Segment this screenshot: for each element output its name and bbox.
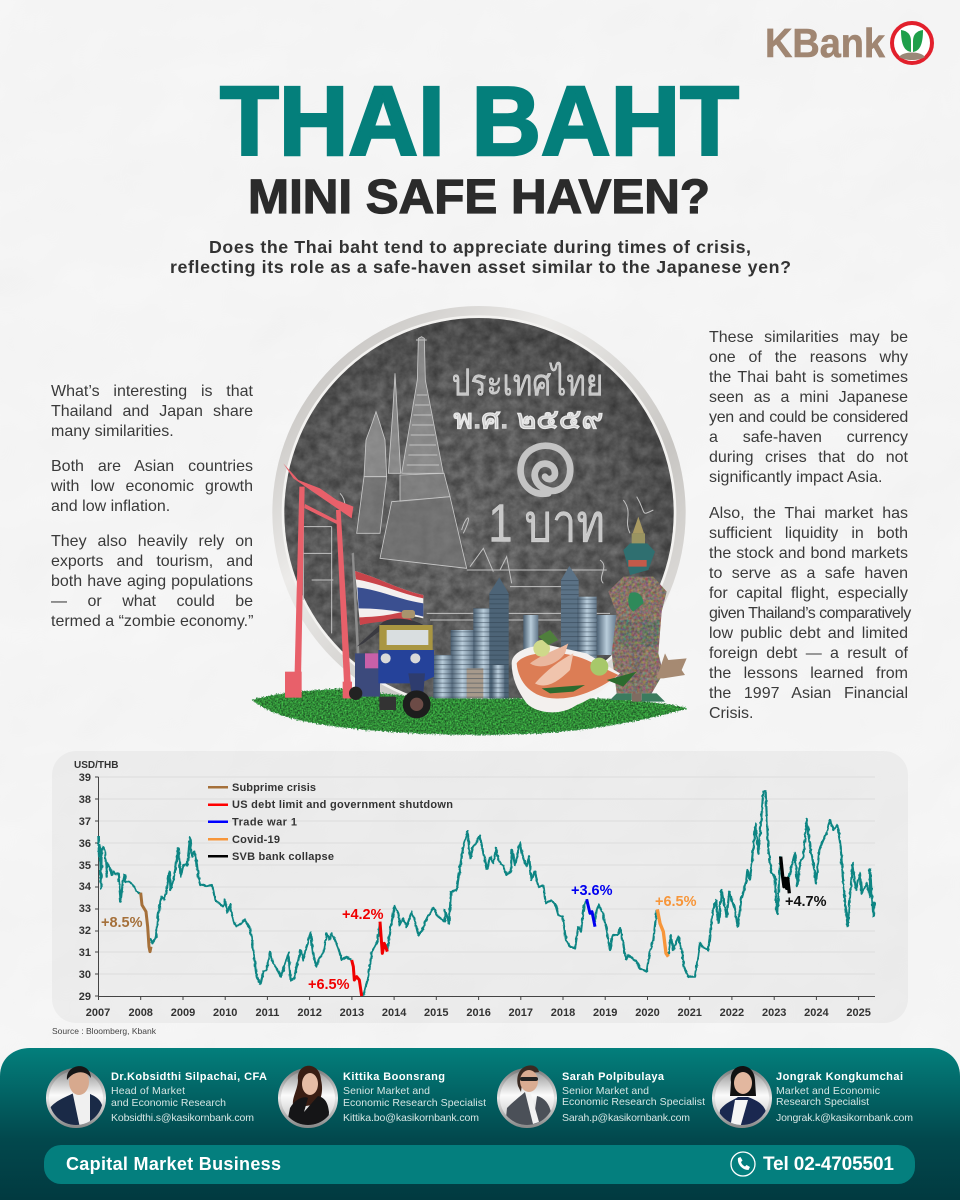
right text block: Also, the Thai market has xyxy=(709,505,908,522)
y axis labels: 39 xyxy=(79,772,91,784)
y axis labels: 38 xyxy=(79,794,91,806)
x axis labels: 2022 xyxy=(720,1007,744,1019)
person: Kobsidthi: Kobsidthi.s@kasikornbank.com xyxy=(111,1112,254,1124)
right text block: the lessons learned from xyxy=(709,665,908,682)
left text block: with low economic growth xyxy=(51,478,253,495)
right text block: yen and could be considered xyxy=(709,409,908,426)
x axis labels: 2010 xyxy=(213,1007,237,1019)
highlight: US debt limit 2013 decline xyxy=(352,960,362,996)
y axis labels: 35 xyxy=(79,860,91,872)
legend: SVB bank collapse xyxy=(232,851,334,863)
highlight: covid-19 xyxy=(657,909,668,957)
coin inscription xyxy=(452,362,605,554)
y axis labels xyxy=(79,772,92,1003)
icon: telephone xyxy=(731,1152,755,1176)
right text block: for capital flight, especially xyxy=(709,585,908,602)
person: Sarah: Senior Market and xyxy=(562,1085,649,1097)
person: Sarah: Sarah.p@kasikornbank.com xyxy=(562,1112,690,1124)
coin inscription: พ.ศ. ๒๕๕๙ xyxy=(453,403,603,434)
person: Kittika: Kittika Boonsrang xyxy=(343,1071,445,1083)
x axis labels: 2014 xyxy=(382,1007,407,1019)
person: Kobsidthi: and Economic Research xyxy=(111,1097,226,1109)
right text block: foreign debt — a result of xyxy=(709,645,908,662)
icon: tom yum bowl xyxy=(512,630,637,712)
right text block: low public debt and limited xyxy=(709,625,908,642)
y axis labels: 34 xyxy=(79,881,92,893)
USD/THB line xyxy=(98,831,490,996)
chart panel: USD/THB xyxy=(52,751,908,1036)
source note: Source : Bloomberg, Kbank xyxy=(52,1026,157,1036)
person: Kobsidthi xyxy=(48,1066,267,1128)
person: Kittika: Senior Market and xyxy=(343,1085,430,1097)
right text block: one of the reasons why xyxy=(709,349,908,366)
x axis labels: 2011 xyxy=(255,1007,279,1019)
x axis labels: 2021 xyxy=(677,1007,702,1019)
icon: giant swing xyxy=(283,463,353,698)
y axis labels: 29 xyxy=(79,991,91,1003)
coin inscription: 1 บาท xyxy=(488,495,605,554)
subtitle: Does the Thai baht tend to appreciate during times of crisis, xyxy=(209,237,751,257)
right text block: Crisis. xyxy=(709,705,753,722)
axis title: USD/THB xyxy=(74,760,118,771)
coin inscription: ประเทศไทย xyxy=(452,362,603,404)
left text block: both have aging populations xyxy=(51,573,253,590)
y axis labels: 33 xyxy=(79,903,91,915)
person: Jongrak xyxy=(714,1066,913,1128)
person: Kittika: Economic Research Specialist xyxy=(343,1097,486,1109)
x axis labels: 2023 xyxy=(762,1007,786,1019)
y axis labels: 32 xyxy=(79,925,91,937)
person: Kittika: Kittika.bo@kasikornbank.com xyxy=(343,1112,479,1124)
right text block: during crises that do not xyxy=(709,449,908,466)
legend: US debt limit and government shutdown xyxy=(232,799,453,811)
person: Kobsidthi: Dr.Kobsidthi Silpachai, CFA xyxy=(111,1071,267,1083)
y axis labels: 36 xyxy=(79,838,91,850)
legend: Subprime crisis xyxy=(232,782,316,794)
x axis labels: 2012 xyxy=(297,1007,322,1019)
right text block xyxy=(709,329,912,722)
person: Sarah: Sarah Polpibulaya xyxy=(562,1071,665,1083)
person: Sarah: Economic Research Specialist xyxy=(562,1096,705,1108)
title: MINI SAFE HAVEN? xyxy=(248,170,710,224)
right text block: a safe-haven currency xyxy=(709,429,908,446)
value labels: +6.5% xyxy=(655,894,697,910)
x axis labels: 2007 xyxy=(86,1007,110,1019)
contact bar xyxy=(44,1145,915,1184)
subtitle: reflecting its role as a safe-haven asset similar to the Japanese yen? xyxy=(170,257,791,277)
right text block: given Thailand’s comparatively xyxy=(709,605,911,622)
axes xyxy=(95,777,875,1000)
x axis labels: 2018 xyxy=(551,1007,575,1019)
left text block xyxy=(51,383,253,630)
illustration: baht coin with Thai landmarks xyxy=(251,306,688,736)
right text block: the 1997 Asian Financial xyxy=(709,685,908,702)
value labels: +8.5% xyxy=(101,915,143,931)
left text block: They also heavily rely on xyxy=(51,533,253,550)
legend: Trade war 1 xyxy=(232,816,297,828)
person: Kittika xyxy=(280,1066,486,1128)
person: Jongrak: Jongrak Kongkumchai xyxy=(776,1071,903,1083)
coin xyxy=(272,306,686,719)
x axis labels: 2015 xyxy=(424,1007,449,1019)
x axis labels: 2025 xyxy=(846,1007,871,1019)
x axis labels: 2017 xyxy=(509,1007,533,1019)
contact bar: Tel 02-4705501 xyxy=(763,1154,894,1175)
right text block: to serve as a safe haven xyxy=(709,565,908,582)
value labels: +4.7% xyxy=(785,894,827,910)
grass xyxy=(252,688,688,735)
icon: buildings xyxy=(433,566,617,698)
left text block: — or what could be xyxy=(51,593,253,610)
gridlines xyxy=(98,777,875,974)
coin numeral mark xyxy=(521,446,570,494)
left text block: What’s interesting is that xyxy=(51,383,253,400)
value labels: +3.6% xyxy=(571,883,613,899)
right text block: significantly impact Asia. xyxy=(709,469,882,486)
left text block: Thailand and Japan share xyxy=(51,403,253,420)
person: Kobsidthi: Head of Market xyxy=(111,1085,185,1097)
left text block: Both are Asian countries xyxy=(51,458,253,475)
person: Jongrak: Research Specialist xyxy=(776,1096,869,1108)
left text block: and low inflation. xyxy=(51,498,170,515)
KBank logo: KBank xyxy=(765,20,885,66)
subtitle xyxy=(170,237,791,277)
right text block: These similarities may be xyxy=(709,329,908,346)
person: Jongrak: Market and Economic xyxy=(776,1085,880,1097)
y axis labels: 37 xyxy=(79,816,91,828)
highlight: trade war 1 xyxy=(587,899,595,927)
left text block: termed a “zombie economy.” xyxy=(51,613,253,630)
right text block: the Thai baht is sometimes xyxy=(709,369,908,386)
left text block: exports and tourism, and xyxy=(51,553,253,570)
y axis labels: 30 xyxy=(79,969,91,981)
icon: Thai flag xyxy=(352,553,423,653)
value labels xyxy=(101,883,827,993)
x axis labels: 2008 xyxy=(128,1007,153,1019)
legend xyxy=(208,782,453,863)
value labels: +4.2% xyxy=(342,907,384,923)
x axis labels: 2019 xyxy=(593,1007,617,1019)
highlight: US shutdown 2013 xyxy=(380,922,387,953)
y axis labels: 31 xyxy=(79,947,91,959)
left text block: many similarities. xyxy=(51,423,174,440)
right text block: sufficient liquidity in both xyxy=(709,525,908,542)
x axis labels: 2024 xyxy=(804,1007,830,1019)
x axis labels: 2009 xyxy=(171,1007,195,1019)
person: Jongrak: Jongrak.k@kasikornbank.com xyxy=(776,1112,913,1124)
icon: giant guardian statue xyxy=(608,517,687,702)
contact bar: Capital Market Business xyxy=(66,1154,281,1174)
right text block: the stock and bond markets xyxy=(709,545,908,562)
value labels: +6.5% xyxy=(308,977,350,993)
right text block: seen as a mini Japanese xyxy=(709,389,908,406)
x axis labels: 2013 xyxy=(340,1007,364,1019)
highlight: subprime crisis xyxy=(141,893,151,952)
x axis labels xyxy=(86,1007,871,1019)
legend: Covid-19 xyxy=(232,834,280,846)
x axis labels: 2016 xyxy=(466,1007,491,1019)
person: Sarah xyxy=(498,1065,705,1128)
highlight: SVB bank collapse xyxy=(781,857,789,893)
coin relief: temple xyxy=(357,337,467,568)
x axis labels: 2020 xyxy=(635,1007,660,1019)
footer panel xyxy=(0,1048,960,1200)
icon: tuk tuk xyxy=(349,610,434,718)
title xyxy=(220,70,740,224)
